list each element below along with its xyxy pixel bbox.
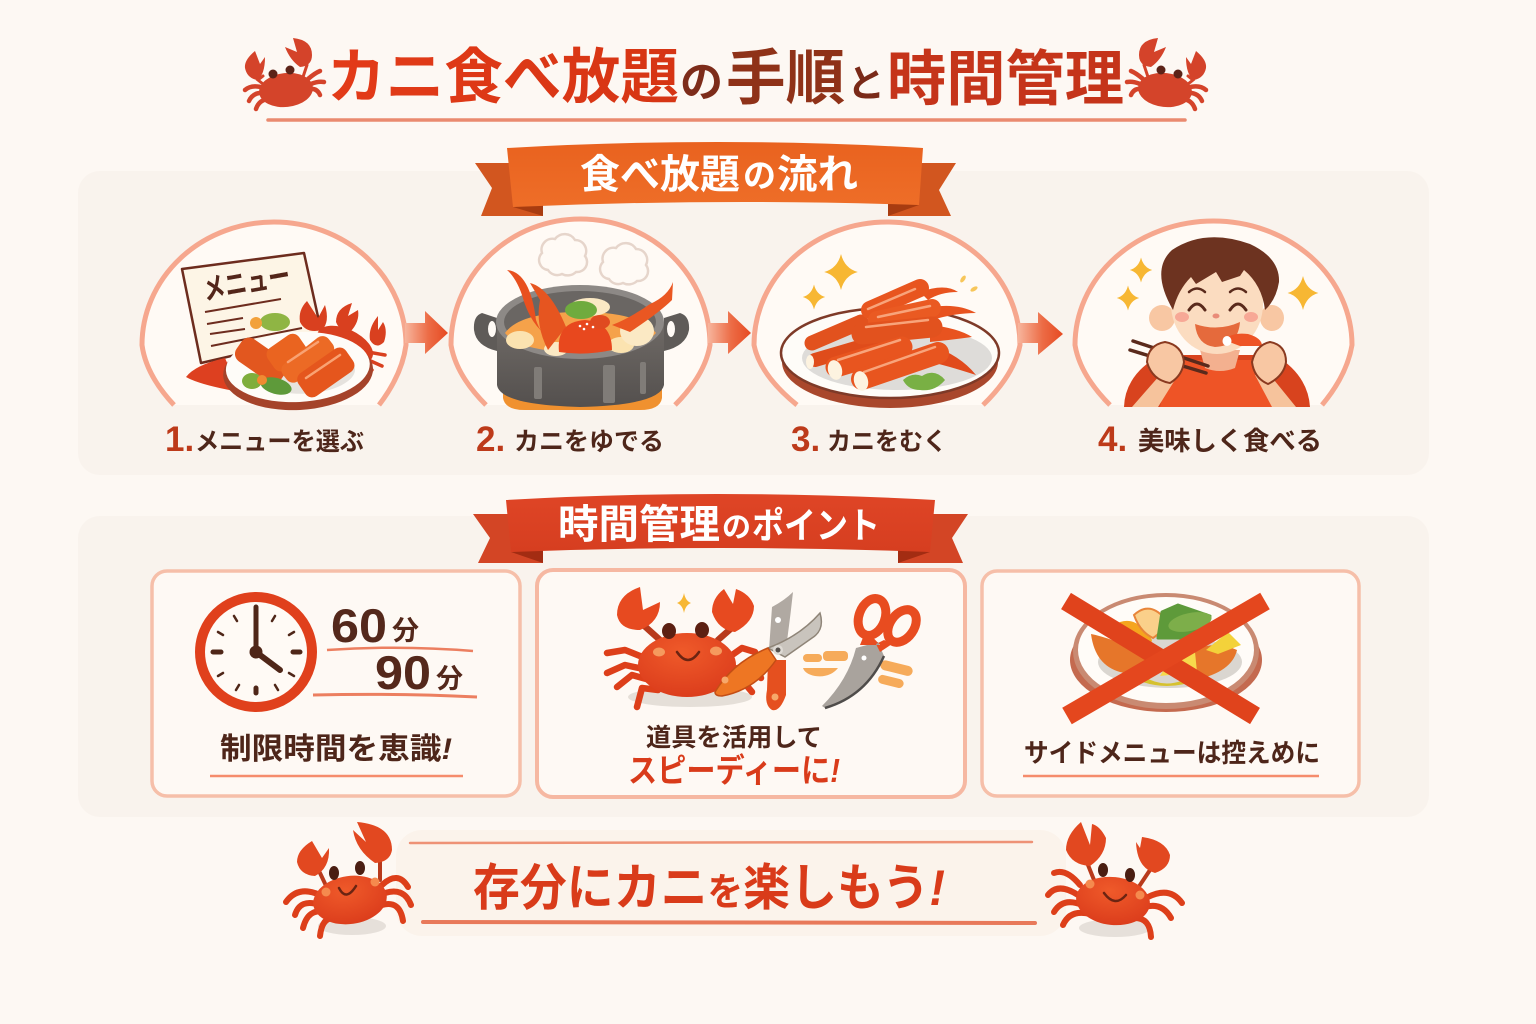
caption emphasis: スピーディーに! [628,752,840,789]
title text: 手順 [726,45,845,112]
step 2: boil crab [451,219,710,410]
icon: cross mark [1066,601,1265,716]
panel: time [78,516,1429,817]
plate [781,308,999,408]
title [245,38,1206,120]
label 2: 2. [476,420,505,459]
banner: time heading: 時間管理 [558,503,720,547]
banner: flow heading: 流れ [777,153,858,197]
dome [451,219,710,405]
closing message [396,830,1066,936]
arrow 2 [708,311,751,354]
card: time limit [152,571,520,796]
dome [754,222,1020,405]
burner base [503,377,662,410]
label 1: メニューを選ぶ [195,428,364,456]
title underline [268,118,1185,122]
icon: footer crab left [286,822,411,936]
durations: 60 [331,599,387,652]
message text: 存分にカニを楽しもう! [473,860,945,916]
small crab behind plate [300,301,386,372]
steam clouds [539,234,648,284]
label 3: 3. [791,420,820,459]
label 2 [476,420,664,459]
red splash [186,358,240,392]
dome [1075,221,1352,405]
crab meat pieces [803,651,914,689]
icon: scissors [822,595,922,708]
label 3 [791,420,947,459]
durations [313,599,477,699]
caption: 制限時間を恵識 ! [220,733,452,766]
icon: shears [715,592,821,710]
label 1 [165,420,364,459]
caption underline [1023,775,1319,777]
sparkles [1117,258,1318,310]
durations: 分 [436,664,463,694]
pot contents [506,270,673,356]
label 4 [1098,420,1322,459]
title text: 時間管理 [887,46,1124,113]
arrow 1 [405,311,448,354]
plate [221,328,375,414]
step 1: choose menu [142,222,406,414]
menu card: メニュー [201,260,293,307]
dome [142,222,406,405]
crab legs [806,288,976,392]
caption underline [210,775,463,777]
step 4: eat [1075,221,1352,407]
band [396,830,1066,936]
wasabi garnish [903,373,945,390]
banner: flow heading [475,142,956,216]
caption: サイドメニューは控えめに [1024,738,1320,768]
title text: の [680,59,723,107]
pot [474,285,689,407]
step 3: peel crab [754,222,1020,408]
arrow 3 [1018,312,1063,355]
banner: time heading [473,494,968,563]
durations: 分 [392,616,419,646]
step labels [165,420,1322,459]
label 3: カニをむく [827,428,947,456]
icon: crab left [245,38,324,110]
icon: plate of sides [1070,593,1262,712]
label 2: カニをゆでる [514,428,664,456]
durations: 90 [375,646,431,699]
boy [1124,237,1310,407]
banner: time heading: の [722,512,751,544]
label 4: 美味しく食べる [1138,426,1322,456]
top rule [410,842,1032,843]
crab pieces [231,331,358,401]
title text [327,44,1124,113]
panel: flow [78,171,1429,475]
banner: flow heading: 食べ放題 [580,153,740,197]
caption: 道具を活用して [646,724,822,752]
sparkles [803,254,978,310]
title text: カニ食べ放題 [327,44,679,111]
icon: crab [607,587,761,707]
card: tools [537,570,965,797]
label 4: 4. [1098,420,1127,459]
icon: footer crab right [1048,822,1182,937]
title text: と [847,64,885,106]
card: side menu [982,571,1359,796]
menu card [182,253,322,363]
label 1: 1. [165,420,194,459]
icon: crab right [1127,38,1206,110]
icon: clock [200,597,312,707]
banner: flow heading: の [743,157,776,194]
banner: time heading: ポイント [752,505,880,546]
bottom rule [423,922,1035,923]
